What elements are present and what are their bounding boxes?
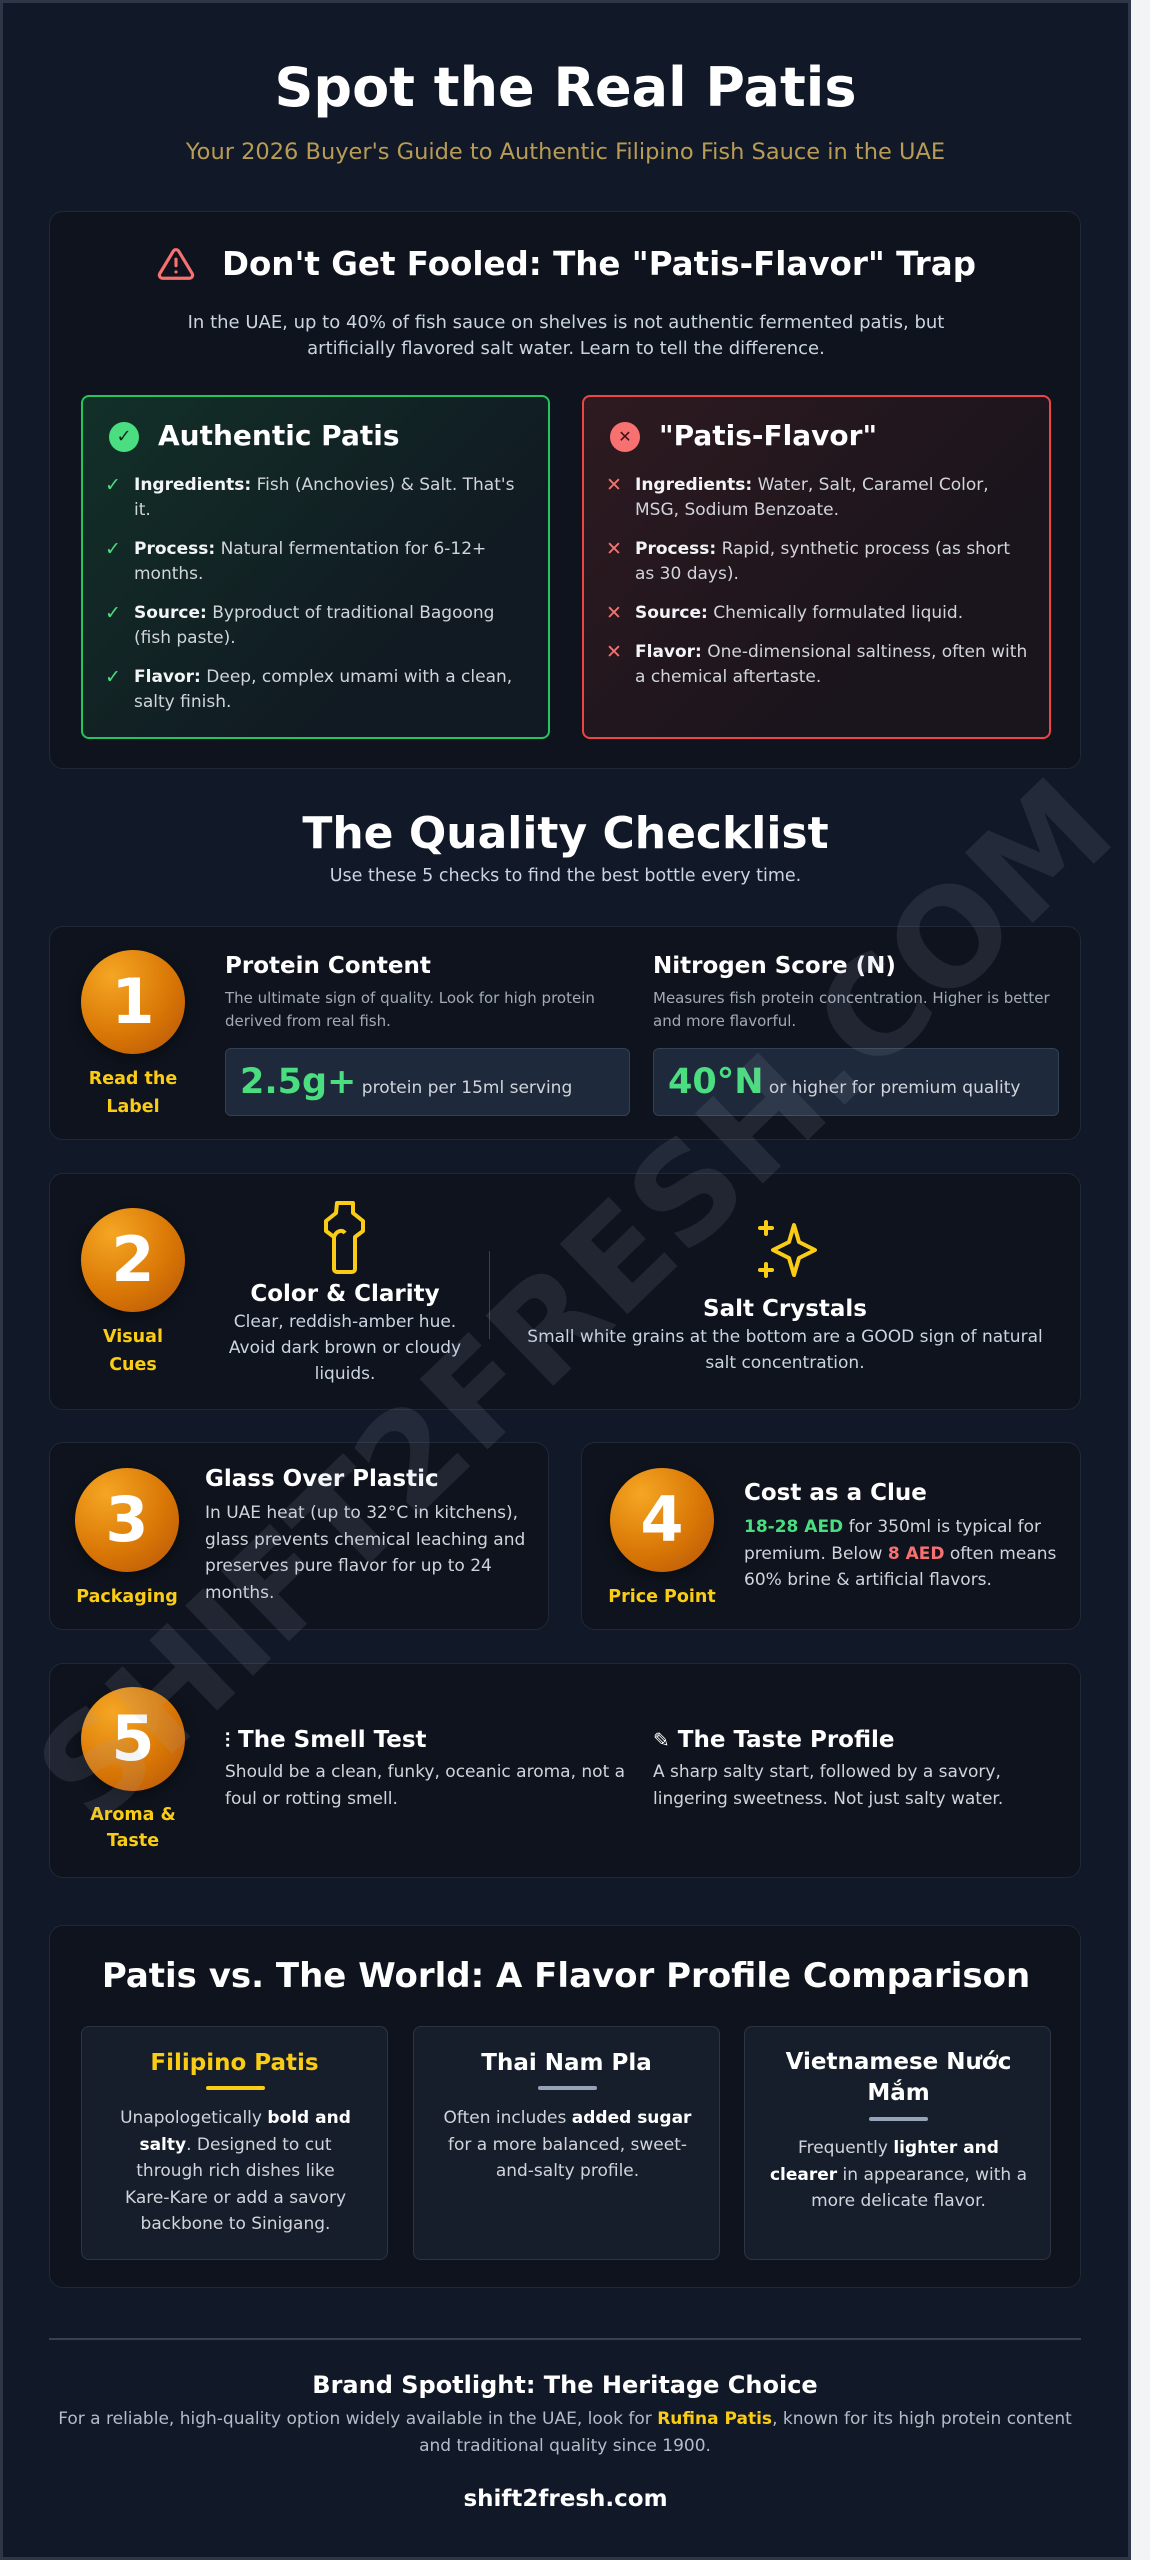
authentic list: ✓ bbox=[105, 538, 121, 560]
nitrogen score: Nitrogen Score (N) bbox=[653, 953, 896, 979]
protein content: The ultimate sign of quality. Look for high protein derived from real fish. bbox=[225, 989, 595, 1030]
fake list: Flavor: One-dimensional saltiness, often with a chemical aftertaste. bbox=[635, 642, 1027, 687]
label: read the label bbox=[89, 1069, 177, 1117]
fake heading: "Patis-Flavor" bbox=[659, 419, 877, 452]
column: thai nam pla: Thai Nam Pla bbox=[481, 2050, 652, 2076]
panel: check 5 aroma & taste bbox=[49, 1663, 1081, 1878]
panel: check 2 visual cues bbox=[49, 1173, 1081, 1410]
badge 5 bbox=[81, 1687, 185, 1791]
authentic list: ✓ bbox=[105, 666, 121, 688]
badge 3: 3 bbox=[105, 1483, 149, 1556]
icon: bottle bbox=[324, 1201, 365, 1274]
authentic list: ✓ bbox=[105, 602, 121, 624]
brand spotlight bbox=[58, 2371, 1072, 2456]
column: thai nam pla bbox=[413, 2026, 720, 2260]
label: aroma & taste: Aroma & bbox=[90, 1805, 176, 1825]
box: patis-flavor bbox=[582, 395, 1051, 739]
title: Spot the Real Patis bbox=[275, 56, 856, 119]
trap heading: Don't Get Fooled: The "Patis-Flavor" Trap bbox=[222, 245, 976, 283]
checklist heading: The Quality Checklist bbox=[302, 808, 829, 859]
panel: comparison bbox=[49, 1925, 1081, 2288]
taste profile: A sharp salty start, followed by a savory, lingering sweetness. Not just salty water. bbox=[653, 1762, 1003, 1808]
stat: nitrogen: 40°N or higher for premium quality bbox=[668, 1062, 1020, 1102]
subtitle: Your 2026 Buyer's Guide to Authentic Filipino Fish Sauce in the UAE bbox=[186, 139, 945, 165]
taste profile: ✎ The Taste Profile bbox=[653, 1727, 895, 1753]
glass over plastic: Glass Over Plastic bbox=[205, 1466, 439, 1492]
fake list: ✕ bbox=[606, 641, 622, 663]
box: authentic bbox=[81, 395, 550, 739]
fake list: ✕ bbox=[606, 474, 622, 496]
badge 2: 2 bbox=[111, 1223, 155, 1296]
label: price point: Price Point bbox=[608, 1587, 716, 1607]
watermark: SHIFT2FRESH.COM bbox=[8, 750, 1142, 1852]
color & clarity: Clear, reddish-amber hue. Avoid dark brown or cloudy liquids. bbox=[229, 1312, 461, 1384]
cost as a clue: Cost as a Clue bbox=[744, 1480, 927, 1506]
cost as a clue bbox=[744, 1480, 1056, 1590]
badge 5: 5 bbox=[111, 1702, 155, 1775]
panel: check 1 read the label bbox=[49, 926, 1081, 1140]
icon: check circle bbox=[109, 422, 139, 452]
label: read the label: Label bbox=[106, 1097, 160, 1117]
column: filipino patis: Filipino Patis bbox=[150, 2050, 319, 2076]
color & clarity bbox=[229, 1281, 461, 1384]
label: visual cues: Cues bbox=[109, 1355, 157, 1375]
smell test: ⫶ The Smell Test bbox=[225, 1727, 426, 1753]
authentic heading: Authentic Patis bbox=[158, 419, 400, 452]
column: filipino patis: Unapologetically bold and salty. Designed to cut through rich dishes like Kare-Kare or add a savory backbone to Sinigang. bbox=[120, 2108, 351, 2234]
salt crystals: Small white grains at the bottom are a GOOD sign of natural salt concentration. bbox=[527, 1327, 1043, 1373]
label: read the label: Read the bbox=[89, 1069, 177, 1089]
salt crystals: Salt Crystals bbox=[703, 1296, 867, 1322]
smell test bbox=[225, 1727, 625, 1808]
protein content bbox=[224, 953, 595, 1030]
column: vietnamese nuoc mam bbox=[744, 2026, 1051, 2260]
column: filipino patis bbox=[81, 2026, 388, 2260]
footer url: shift2fresh.com bbox=[463, 2486, 668, 2512]
label: visual cues bbox=[103, 1327, 163, 1375]
panel: patis-flavor trap bbox=[49, 211, 1081, 769]
protein content: Protein Content bbox=[225, 953, 431, 979]
authentic list: Ingredients: Fish (Anchovies) & Salt. That's it. bbox=[134, 475, 514, 520]
badge 4: 4 bbox=[640, 1483, 684, 1556]
nitrogen score bbox=[653, 953, 1050, 1030]
fake list: ✕ bbox=[606, 538, 622, 560]
fake list: Ingredients: Water, Salt, Caramel Color, MSG, Sodium Benzoate. bbox=[635, 475, 989, 520]
label: aroma & taste bbox=[90, 1805, 176, 1851]
label: packaging: Packaging bbox=[76, 1587, 178, 1607]
nitrogen score: Measures fish protein concentration. Higher is better and more flavorful. bbox=[653, 989, 1050, 1030]
authentic list: Source: Byproduct of traditional Bagoong (fish paste). bbox=[134, 603, 494, 648]
authentic list bbox=[105, 474, 514, 712]
fake list: Process: Rapid, synthetic process (as short as 30 days). bbox=[635, 539, 1010, 584]
cost as a clue: 18-28 AED for 350ml is typical for premium. Below 8 AED often means 60% brine & artificial flavors. bbox=[744, 1517, 1056, 1590]
stat: protein bbox=[225, 1048, 630, 1116]
column: thai nam pla: Often includes added sugar for a more balanced, sweet-and-salty profile. bbox=[444, 2108, 691, 2181]
label: aroma & taste: Taste bbox=[107, 1831, 159, 1851]
column: vietnamese nuoc mam: Frequently lighter and clearer in appearance, with a more delicate flavor. bbox=[770, 2138, 1027, 2211]
smell test: Should be a clean, funky, oceanic aroma, not a foul or rotting smell. bbox=[225, 1762, 625, 1808]
brand spotlight: Brand Spotlight: The Heritage Choice bbox=[312, 2371, 818, 2399]
authentic list: ✓ bbox=[105, 474, 121, 496]
panel: check 3 packaging bbox=[49, 1442, 549, 1630]
fake list bbox=[606, 474, 1027, 687]
stat: nitrogen bbox=[653, 1048, 1059, 1116]
icon: warning bbox=[158, 248, 194, 280]
badge 4 bbox=[610, 1468, 714, 1572]
column: vietnamese nuoc mam: Vietnamese Nước Mắm bbox=[786, 2049, 1011, 2106]
intro text: In the UAE, up to 40% of fish sauce on shelves is not authentic fermented patis, but artificially flavored salt water. Learn to tell the difference. bbox=[188, 312, 944, 359]
fake list: Source: Chemically formulated liquid. bbox=[635, 603, 963, 623]
badge 2 bbox=[81, 1208, 185, 1312]
badge 1 bbox=[81, 950, 185, 1054]
icon: x circle bbox=[610, 422, 640, 452]
color & clarity: Color & Clarity bbox=[250, 1281, 440, 1307]
icon: x circle: ✕ bbox=[618, 427, 632, 446]
label: visual cues: Visual bbox=[103, 1327, 163, 1347]
badge 1: 1 bbox=[111, 965, 155, 1038]
checklist subtitle: Use these 5 checks to find the best bottle every time. bbox=[330, 866, 801, 886]
icon: check circle: ✓ bbox=[116, 426, 132, 447]
taste profile bbox=[653, 1727, 1003, 1808]
panel: check 4 price bbox=[581, 1442, 1081, 1630]
badge 3 bbox=[75, 1468, 179, 1572]
authentic list: Flavor: Deep, complex umami with a clean, salty finish. bbox=[134, 667, 512, 712]
comparison heading: Patis vs. The World: A Flavor Profile Comparison bbox=[102, 1956, 1030, 1996]
icon: sparkles bbox=[758, 1220, 818, 1278]
fake list: ✕ bbox=[606, 602, 622, 624]
glass over plastic: In UAE heat (up to 32°C in kitchens), glass prevents chemical leaching and preserves pure flavor for up to 24 months. bbox=[205, 1503, 525, 1602]
salt crystals bbox=[527, 1296, 1043, 1373]
brand spotlight: For a reliable, high-quality option widely available in the UAE, look for Rufina Patis, known for its high protein content and traditional quality since 1900. bbox=[58, 2409, 1072, 2456]
authentic list: Process: Natural fermentation for 6-12+ months. bbox=[134, 539, 486, 584]
stat: protein: 2.5g+ protein per 15ml serving bbox=[240, 1062, 572, 1102]
